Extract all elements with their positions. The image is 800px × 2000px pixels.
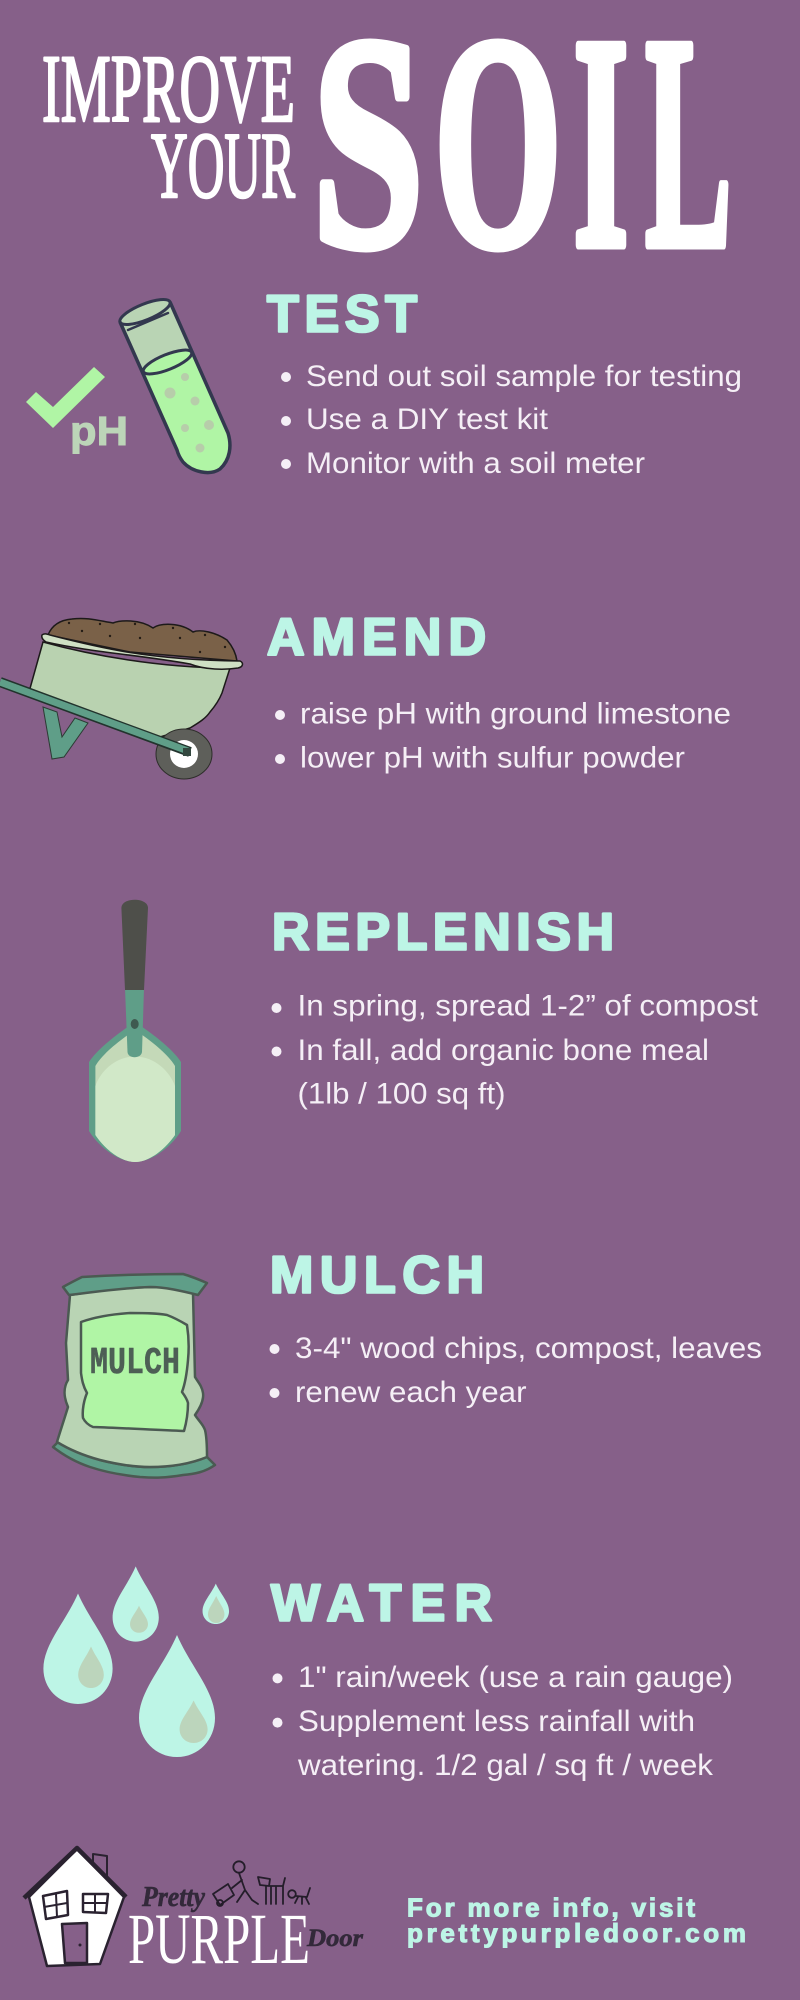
bullet list: replenish: [272, 990, 759, 1110]
panel: amend: [0, 609, 731, 779]
icon: wheelbarrow: [0, 618, 242, 779]
logo script: door: Door: [306, 1925, 363, 1952]
title line: your: YOUR: [151, 114, 295, 218]
bullet list: mulch: renew each year: [295, 1376, 527, 1409]
icon: mulch bag: [53, 1274, 215, 1478]
heading: water: WATER: [271, 1575, 492, 1633]
heading: replenish: REPLENISH: [272, 904, 614, 962]
bullet list: amend: [275, 698, 731, 774]
bullet list: water: Supplement less rainfall with: [298, 1705, 695, 1738]
icon label: pH: pH: [70, 408, 128, 454]
footer logo: [24, 1848, 363, 1979]
footer call to action: prettypurpledoor.com: [407, 1918, 746, 1948]
bullet list: replenish: (1lb / 100 sq ft): [298, 1078, 506, 1110]
icon: water drops: [43, 1566, 229, 1757]
icon: test tube: [117, 294, 230, 473]
bullet list: water: watering. 1/2 gal / sq ft / week: [297, 1749, 714, 1782]
bullet list: replenish: In fall, add organic bone meal: [298, 1034, 709, 1067]
bullet list: test: Use a DIY test kit: [306, 403, 549, 436]
bullet list: test: [281, 360, 742, 480]
bullet list: water: 1" rain/week (use a rain gauge): [298, 1661, 733, 1694]
logo word: purple: PURPLE: [128, 1899, 310, 1979]
panel: test: [26, 286, 742, 480]
bullet list: test: Send out soil sample for testing: [306, 360, 742, 393]
bullet list: test: Monitor with a soil meter: [306, 447, 645, 480]
icon: trowel: [89, 900, 181, 1162]
heading: test: TEST: [267, 286, 417, 344]
bag label text: MULCH: [90, 1342, 180, 1385]
heading: amend: AMEND: [267, 609, 486, 667]
icon: checkmark: [26, 367, 105, 428]
panel: replenish: [89, 900, 759, 1162]
panel: mulch: [53, 1247, 762, 1478]
heading: mulch: MULCH: [270, 1247, 484, 1305]
title: [42, 0, 732, 311]
icon: house: [24, 1848, 126, 1966]
footer call to action: [407, 1893, 746, 1948]
bullet list: water: [272, 1661, 733, 1782]
bullet list: mulch: [270, 1332, 762, 1409]
bullet list: mulch: 3-4" wood chips, compost, leaves: [295, 1332, 762, 1365]
bullet list: amend: lower pH with sulfur powder: [300, 742, 685, 774]
logo script: pretty: Pretty: [141, 1882, 206, 1913]
bullet list: amend: raise pH with ground limestone: [300, 698, 731, 730]
title line: improve: IMPROVE: [42, 35, 295, 142]
footer call to action: For more info, visit: [407, 1893, 695, 1923]
panel: water: [43, 1566, 733, 1782]
bullet list: replenish: In spring, spread 1-2” of compost: [298, 990, 759, 1022]
logo icon: stick family: [213, 1861, 310, 1906]
